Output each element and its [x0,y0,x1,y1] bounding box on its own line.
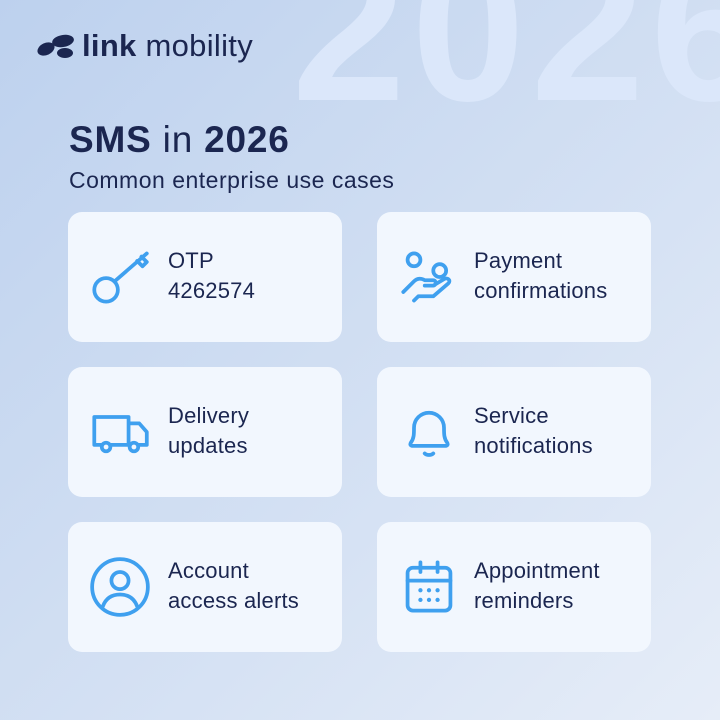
subtitle: Common enterprise use cases [69,167,394,193]
card: delivery: Delivery [168,403,249,428]
card: account: access alerts [168,588,299,613]
card: delivery [68,367,342,497]
card: service [377,367,651,497]
card: appointment: reminders [474,588,574,613]
card: delivery: updates [168,433,248,458]
card: service: notifications [474,433,593,458]
card: service: Service [474,403,549,428]
title: SMS in 2026 [69,119,290,160]
card: account: Account [168,558,249,583]
card: appointment: Appointment [474,558,600,583]
card: OTP [68,212,342,342]
card: payment [377,212,651,342]
card: account [68,522,342,652]
card: payment: confirmations [474,278,607,303]
card: appointment [377,522,651,652]
logo: link mobility [82,28,253,63]
card: OTP: OTP [168,248,214,273]
card: payment: Payment [474,248,562,273]
card: OTP: 4262574 [168,278,255,303]
